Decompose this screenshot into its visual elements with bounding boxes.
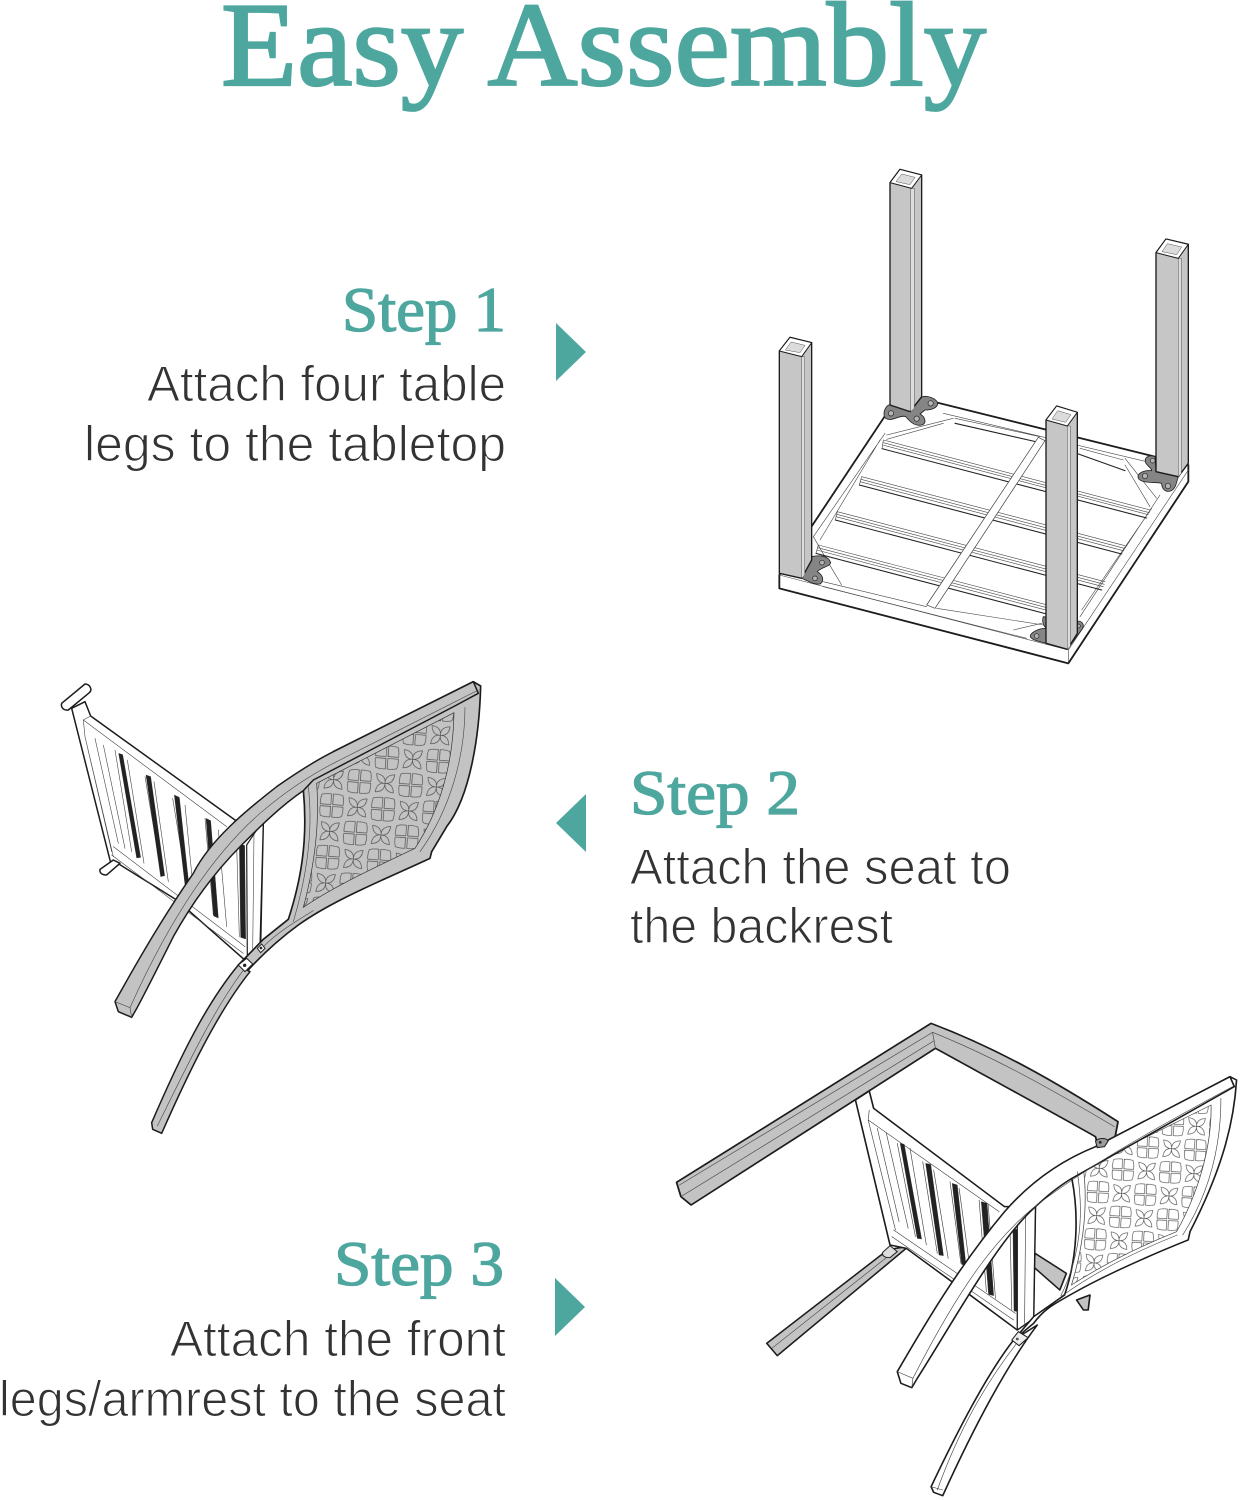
backrest xyxy=(855,1091,1035,1330)
rail details xyxy=(115,690,478,1017)
ribs xyxy=(816,440,1150,614)
illustration: seat attached to backrest xyxy=(61,682,481,1133)
seat floral pattern xyxy=(1071,1105,1211,1285)
front seat rail arc xyxy=(897,1077,1234,1388)
backrest right post xyxy=(1017,1205,1035,1330)
bracket right xyxy=(1138,456,1178,491)
rear leg right xyxy=(1033,1253,1090,1310)
step 3 description: Attach the front xyxy=(170,1311,506,1367)
backrest xyxy=(61,684,263,962)
cross brace xyxy=(927,437,1045,608)
backrest slats xyxy=(900,1143,1019,1312)
step 2 text block xyxy=(630,757,1011,954)
front seat rail arc xyxy=(115,682,478,1017)
step 1 description: legs to the tabletop xyxy=(84,416,506,472)
step 1 description xyxy=(84,356,506,472)
leg left xyxy=(779,337,812,578)
leg rear-left xyxy=(890,169,922,412)
seat panel xyxy=(1014,1077,1237,1340)
bracket left xyxy=(802,556,831,584)
lower seat rail xyxy=(931,1325,1037,1496)
step 2 description xyxy=(630,839,1011,954)
rear leg left xyxy=(767,1247,908,1356)
step 1 heading: Step 1 xyxy=(342,274,506,345)
screw holes xyxy=(813,401,1171,638)
step 2 description: Attach the seat to xyxy=(630,839,1011,895)
bracket front xyxy=(1030,617,1083,649)
step 2 heading: Step 2 xyxy=(630,757,800,828)
bracket rear-left xyxy=(884,396,938,425)
backrest slats xyxy=(119,753,246,939)
leg right xyxy=(1156,239,1188,477)
step 1 text block xyxy=(84,274,506,472)
lower seat rail xyxy=(152,965,250,1133)
tabletop xyxy=(779,393,1188,663)
backrest right post xyxy=(247,820,263,959)
illustration: table upside down with four legs xyxy=(779,169,1188,663)
step 3 text block xyxy=(0,1228,506,1427)
mounting plate top xyxy=(61,684,91,710)
step 3 description: legs/armrest to the seat xyxy=(0,1371,506,1427)
mounting plate bottom xyxy=(100,860,120,875)
illustration: front legs and armrest attached to seat xyxy=(677,1023,1237,1496)
seat panel xyxy=(238,682,481,972)
step 2 description: the backrest xyxy=(630,898,893,954)
seat detail lines xyxy=(897,1086,1234,1490)
bracket joints xyxy=(238,944,265,972)
armrest frame xyxy=(677,1023,1118,1205)
leg front xyxy=(1046,406,1077,649)
joint brackets xyxy=(1012,1138,1108,1346)
step 1 description: Attach four table xyxy=(147,356,506,412)
arrow: step 3 pointing right xyxy=(555,1278,585,1336)
mounting plate xyxy=(883,1246,897,1258)
step 3 heading: Step 3 xyxy=(334,1228,504,1299)
step 3 description xyxy=(0,1311,506,1427)
arrow: step 2 pointing left xyxy=(556,794,586,852)
arrow: step 1 pointing right xyxy=(556,323,586,381)
seat floral pattern xyxy=(303,713,454,907)
